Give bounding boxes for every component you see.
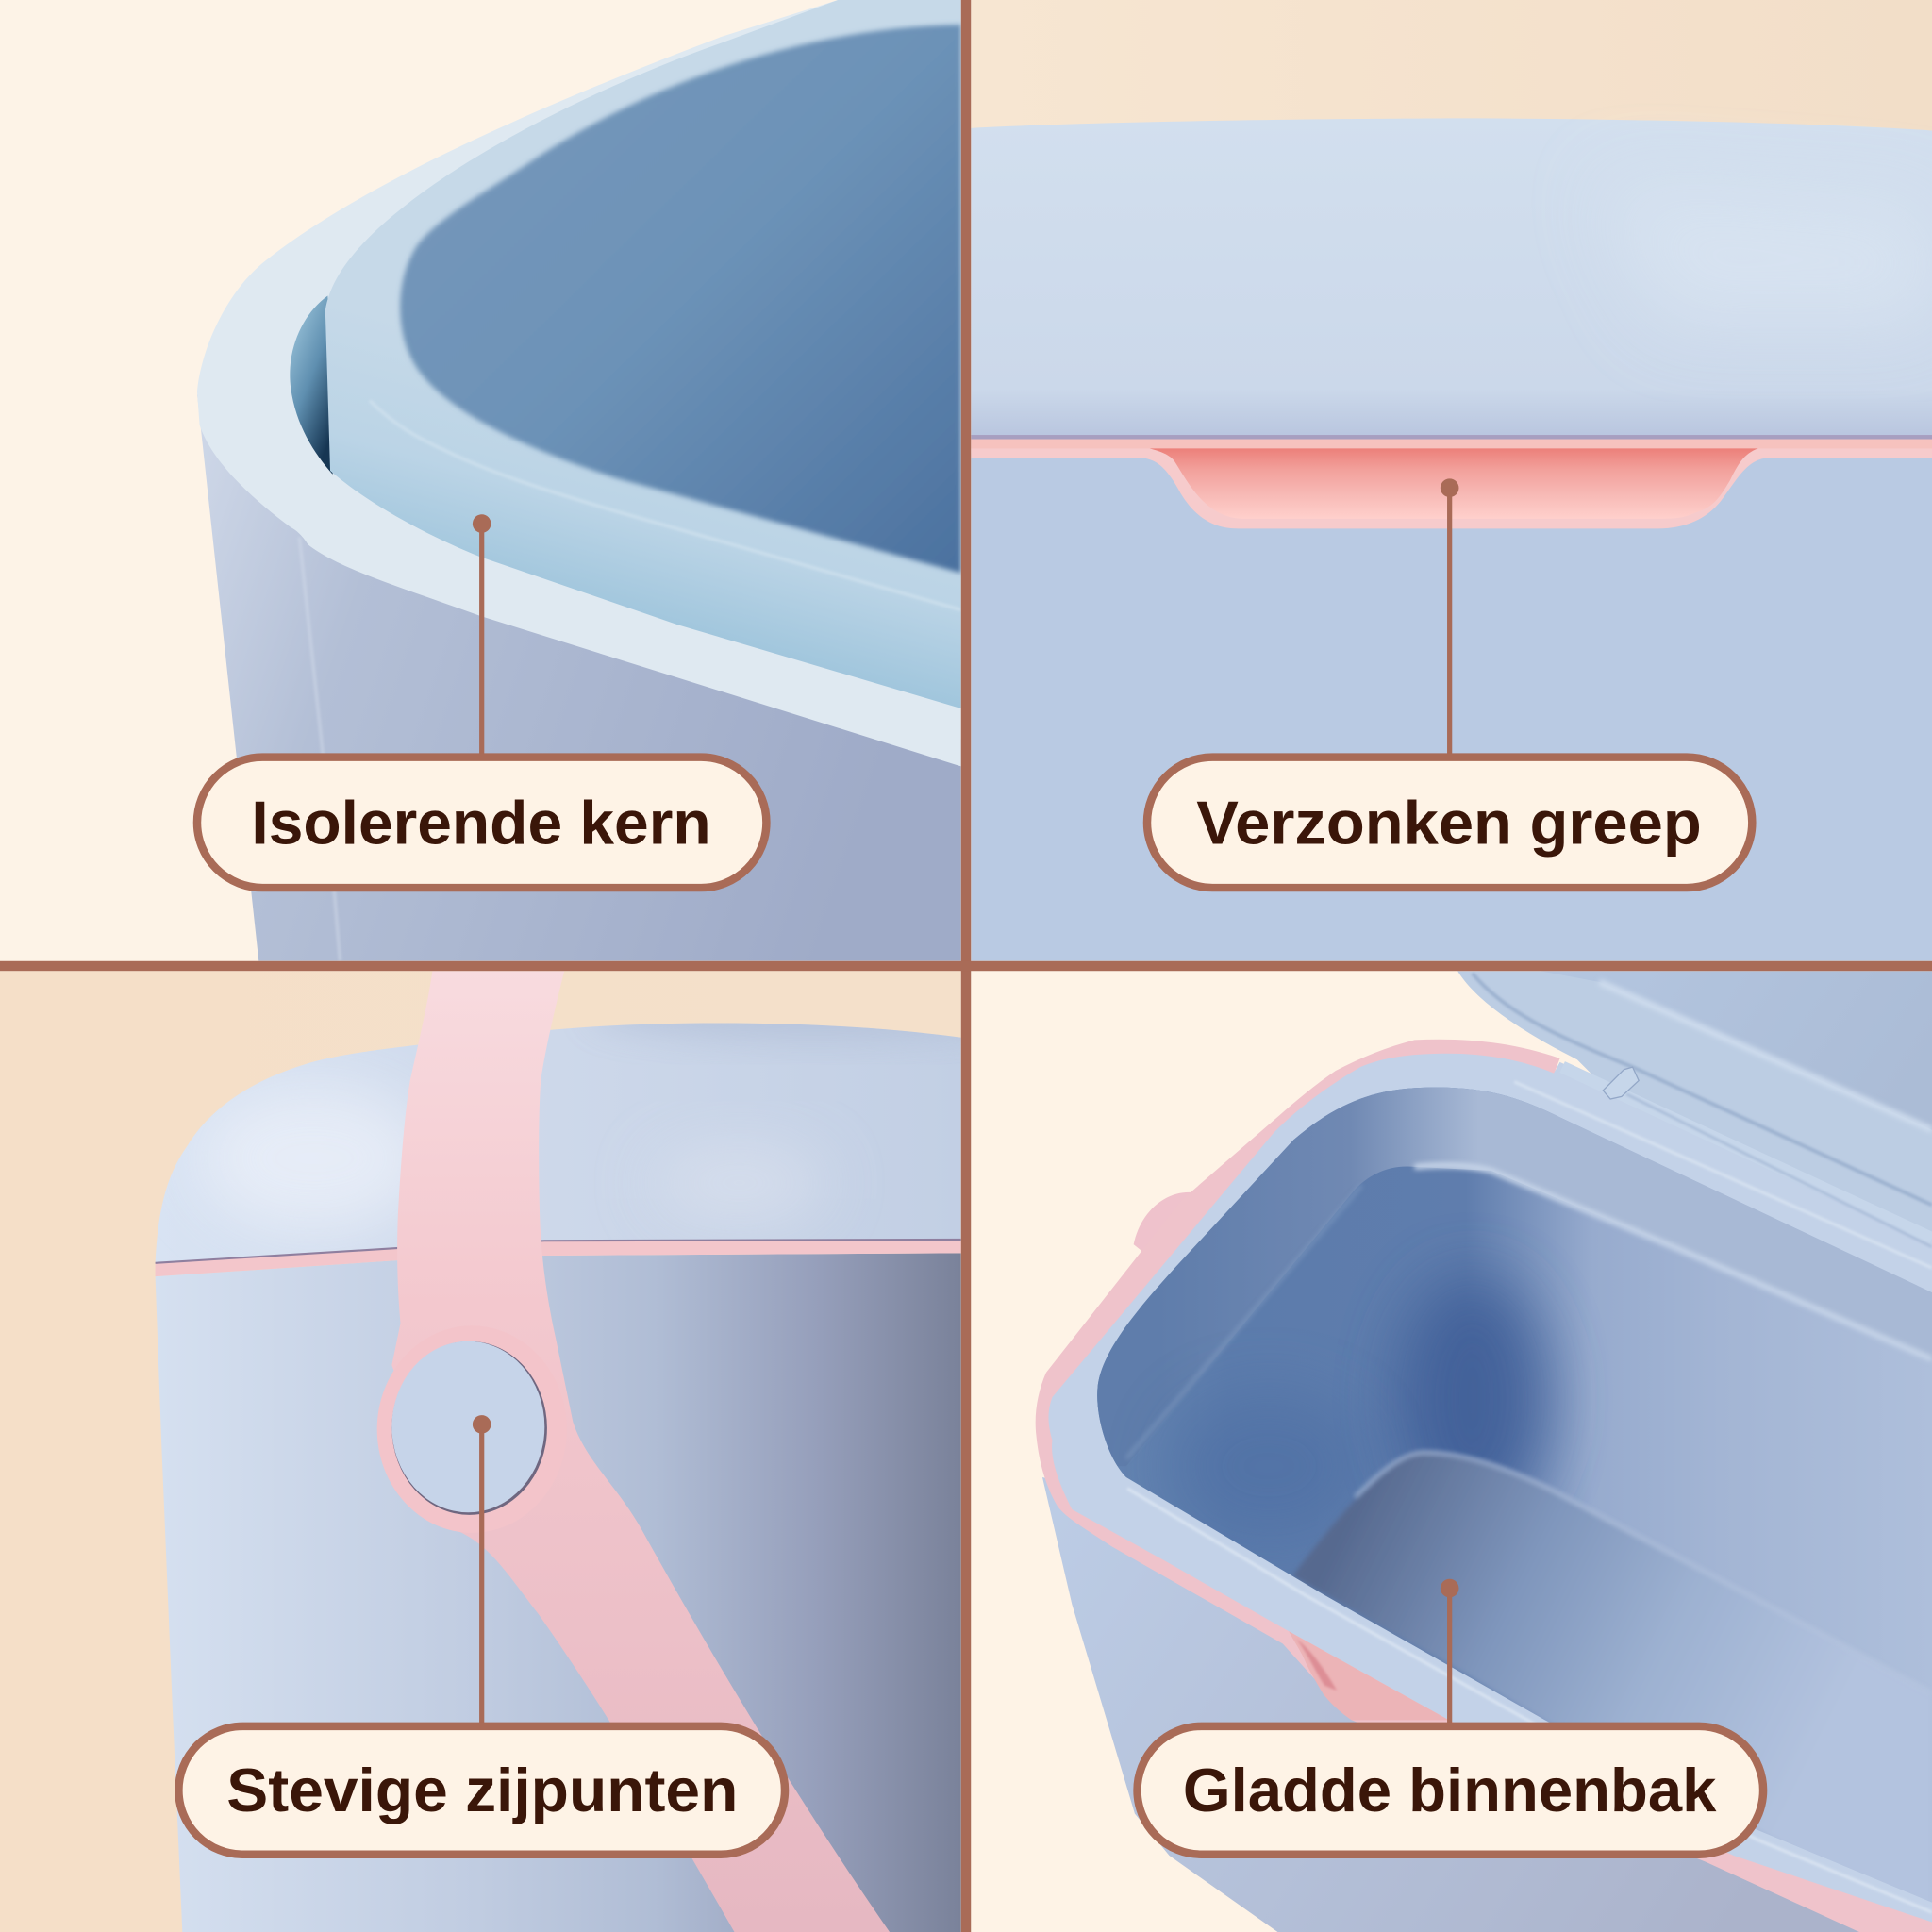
outer body xyxy=(1042,1477,1932,1932)
label: Gladde binnenbak xyxy=(1138,1726,1763,1855)
upper wall band xyxy=(1084,1072,1932,1466)
leader line and dot xyxy=(1441,478,1458,757)
cooler lid xyxy=(971,118,1932,436)
dark interior xyxy=(400,25,961,573)
label: Isolerende kern xyxy=(197,758,766,888)
blue rim xyxy=(1049,1054,1932,1923)
gap between wall and core xyxy=(290,295,333,475)
rim top surface xyxy=(197,0,961,766)
pink seam and grip surround xyxy=(972,449,1932,528)
hinge xyxy=(1603,1067,1639,1099)
front rim highlight xyxy=(1127,1489,1932,1912)
front grip xyxy=(1289,1631,1449,1720)
label: Stevige zijpunten xyxy=(178,1726,785,1855)
leader line and dot xyxy=(473,514,491,758)
label: Isolerende kern: Isolerende kern xyxy=(251,789,711,858)
label: Verzonken greep: Verzonken greep xyxy=(1196,789,1702,858)
cooler base xyxy=(971,454,1932,961)
inner bin walls xyxy=(1084,1072,1932,1928)
pivot button xyxy=(391,1341,547,1515)
leader line and dot xyxy=(473,1415,491,1726)
pivot ring xyxy=(377,1325,567,1533)
panel: stevige zijpunten xyxy=(0,971,1035,1932)
cooler base xyxy=(156,1253,961,1932)
bin floor xyxy=(1292,1453,1932,1923)
panel: gladde binnenbak xyxy=(971,971,1932,1932)
wall step highlight xyxy=(1414,1165,1932,1359)
open lid xyxy=(1457,971,1932,1281)
side pivot xyxy=(1134,1192,1195,1269)
panel: isolerende kern xyxy=(192,0,961,961)
panel: verzonken greep xyxy=(971,0,1932,961)
insulating inner lip xyxy=(325,0,961,708)
label: Stevige zijpunten: Stevige zijpunten xyxy=(226,1756,738,1824)
recessed grip xyxy=(1150,448,1758,519)
label: Gladde binnenbak: Gladde binnenbak xyxy=(1183,1756,1717,1824)
strap xyxy=(391,971,890,1932)
cooler lid xyxy=(155,1023,960,1262)
wall shadow xyxy=(1398,1275,1546,1522)
cooler outer wall xyxy=(197,394,961,961)
label: Verzonken greep xyxy=(1147,758,1752,888)
pink rim xyxy=(1036,1040,1932,1932)
leader line and dot xyxy=(1441,1579,1458,1726)
pink seam xyxy=(156,1240,961,1276)
